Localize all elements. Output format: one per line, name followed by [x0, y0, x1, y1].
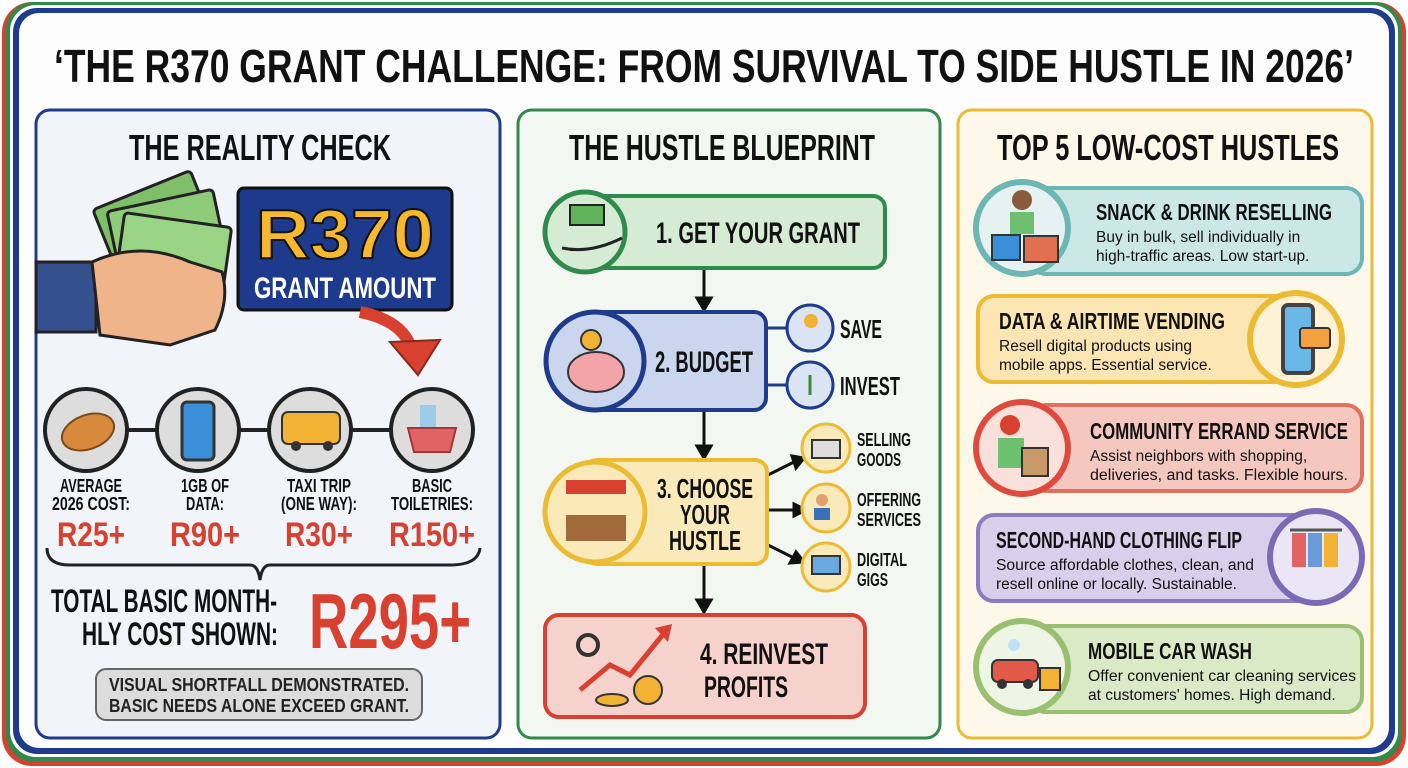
callout: R370 grant amount: GRANT AMOUNT [254, 272, 436, 305]
labels: DATA: [186, 494, 224, 514]
card: snack [976, 182, 1362, 274]
total cost [51, 577, 471, 665]
cost items: R150+ [389, 516, 475, 554]
cost items: R25+ [57, 516, 125, 554]
cost items: R30+ [285, 516, 353, 554]
card: car wash: at customers' homes. High demand. [1088, 687, 1336, 704]
panel: top 5 hustles [958, 110, 1372, 738]
card: clothing [978, 511, 1362, 603]
labels: 2026 COST: [52, 494, 130, 514]
labels: AVERAGE [60, 476, 122, 496]
cost items: R90+ [170, 516, 240, 554]
card: data [978, 293, 1342, 385]
card: clothing: Source affordable clothes, clean, and [996, 557, 1254, 574]
cost items [45, 389, 475, 554]
card: data: mobile apps. Essential service. [999, 357, 1212, 374]
icon: selling goods: GOODS [857, 450, 901, 470]
labels [52, 476, 473, 514]
callout: R370 grant amount: R370 [256, 195, 434, 273]
icon: digital gigs: DIGITAL [857, 550, 907, 570]
card: car wash: MOBILE CAR WASH [1088, 638, 1252, 664]
icon: invest: INVEST [840, 371, 900, 401]
labels: TAXI TRIP [287, 476, 351, 496]
icon: toiletries [391, 389, 473, 471]
callout: R370 grant amount [238, 188, 452, 310]
heading: reality check: THE REALITY CHECK [129, 127, 391, 168]
panel: hustle blueprint [518, 110, 940, 738]
step 4 [545, 615, 865, 717]
card: snack: Buy in bulk, sell individually in [1096, 229, 1300, 246]
card: clothing: resell online or locally. Sustainable. [996, 576, 1237, 593]
heading: hustle blueprint: THE HUSTLE BLUEPRINT [569, 127, 875, 168]
icon: taxi [269, 389, 351, 471]
step 2 [546, 305, 900, 410]
icon: invest [787, 362, 900, 408]
callout: shortfall [96, 669, 422, 720]
total cost: HLY COST SHOWN: [82, 616, 278, 652]
icon: bread [45, 389, 127, 471]
step 3 [545, 424, 921, 591]
step 3: 3. CHOOSE [657, 473, 753, 504]
step 2: 2. BUDGET [655, 346, 753, 379]
labels: 1GB OF [181, 476, 229, 496]
icon: offering services: SERVICES [857, 510, 921, 530]
step 1: 1. GET YOUR GRANT [656, 217, 860, 250]
card: car wash: Offer convenient car cleaning services [1088, 668, 1356, 685]
step 3: YOUR [680, 499, 730, 530]
brace [47, 548, 480, 580]
icon: digital gigs: GIGS [857, 570, 888, 590]
icon: hand with money [36, 171, 232, 345]
total cost: R295+ [309, 577, 471, 665]
panel: reality check [36, 110, 500, 738]
card: snack: high-traffic areas. Low start-up. [1096, 248, 1309, 265]
icon: digital gigs [802, 543, 907, 591]
labels: BASIC [412, 476, 452, 496]
labels: (ONE WAY): [281, 494, 357, 514]
step 4: PROFITS [704, 671, 788, 704]
icon: save: SAVE [840, 314, 882, 344]
icon: save [787, 305, 882, 351]
step 4: 4. REINVEST [700, 638, 828, 671]
card: errand [976, 402, 1362, 494]
card: data: Resell digital products using [999, 338, 1192, 355]
callout: shortfall: BASIC NEEDS ALONE EXCEED GRANT. [109, 696, 409, 716]
arrow: red curve [360, 312, 440, 375]
arrows: flow [697, 268, 711, 612]
icon: selling goods: SELLING [857, 430, 911, 450]
card: data: DATA & AIRTIME VENDING [999, 308, 1225, 334]
step 3: HUSTLE [669, 525, 741, 556]
icon: offering services: OFFERING [857, 490, 921, 510]
card: clothing: SECOND-HAND CLOTHING FLIP [996, 527, 1242, 553]
total cost: TOTAL BASIC MONTH- [51, 583, 277, 619]
step 1 [545, 192, 885, 272]
card: car wash [976, 621, 1362, 713]
icon: selling goods [802, 424, 911, 472]
icon: offering services [802, 484, 921, 532]
card: errand: Assist neighbors with shopping, [1090, 448, 1307, 465]
callout: shortfall: VISUAL SHORTFALL DEMONSTRATED. [109, 675, 409, 695]
labels: TOILETRIES: [391, 494, 473, 514]
icon: phone [157, 389, 239, 471]
card: errand: deliveries, and tasks. Flexible hours. [1090, 467, 1348, 484]
